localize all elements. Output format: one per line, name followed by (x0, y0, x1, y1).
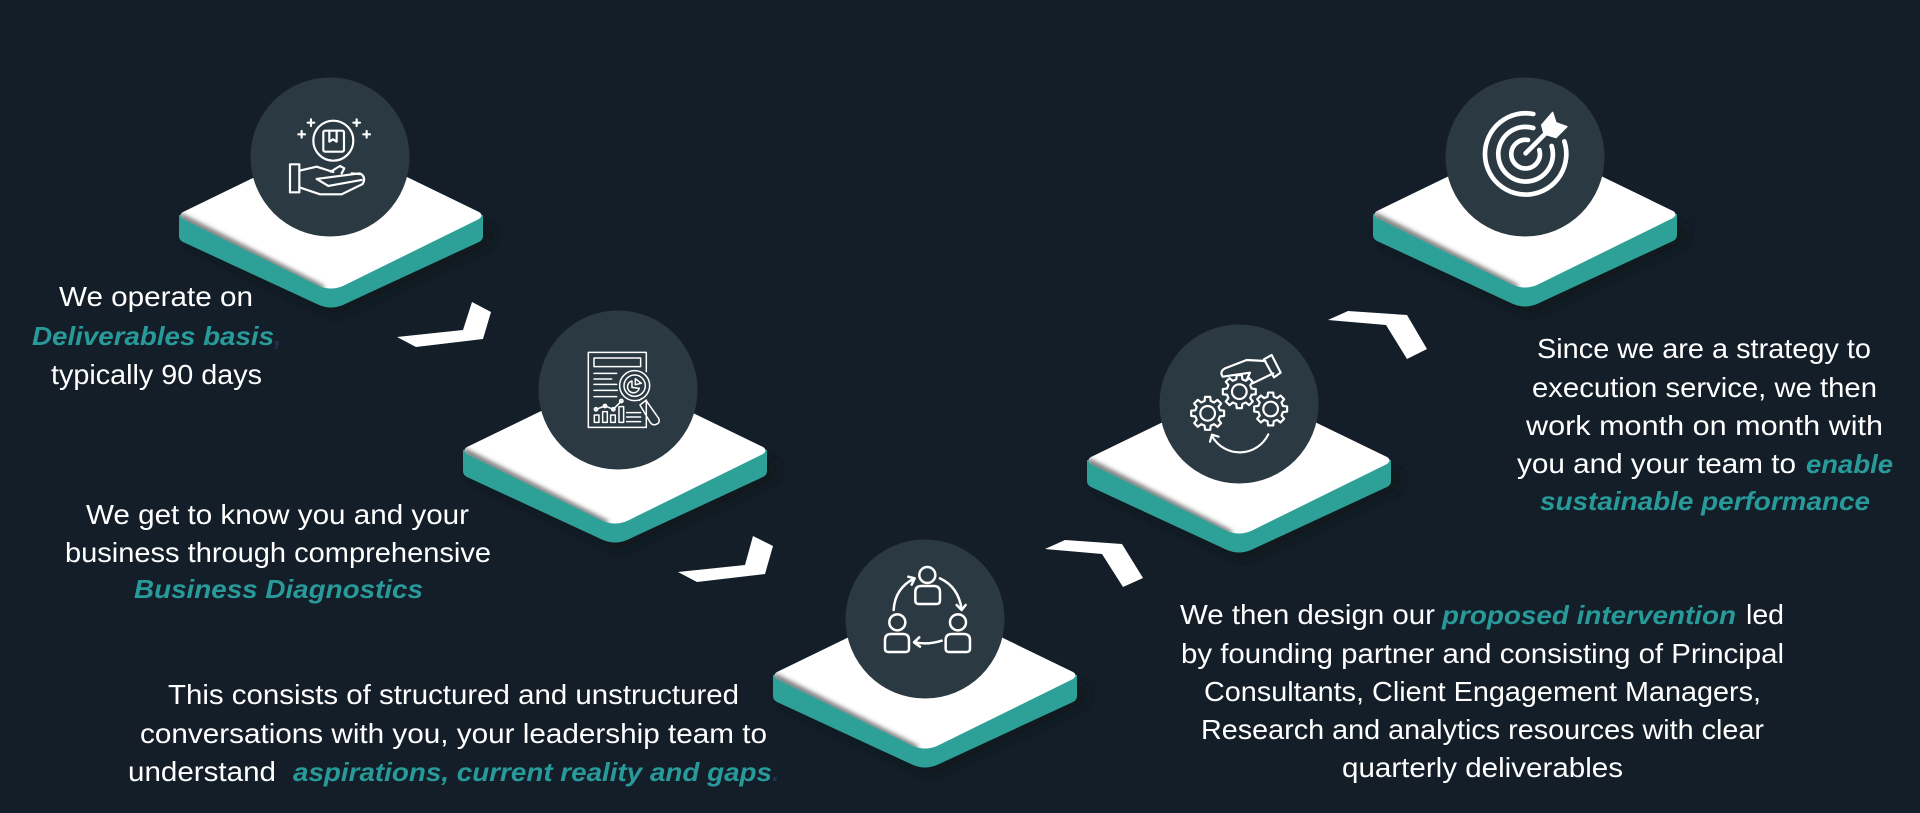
text block 3: This consists of structured and unstructured (168, 679, 739, 710)
text block 5: you and your team to (1517, 448, 1796, 479)
text block 3: conversations with you, your leadership team to (140, 718, 767, 749)
text block 5: enable (1806, 449, 1893, 479)
platform 4 (1087, 388, 1402, 561)
text block 5: work month on month with (1525, 410, 1883, 441)
text block 3: aspirations, current reality and gaps (293, 757, 772, 787)
text block 5 (1517, 333, 1893, 516)
text block 2: We get to know you and your (86, 499, 469, 530)
icon: hand with gears (1191, 355, 1287, 452)
arrow 2 (678, 536, 773, 582)
text block 2: business through comprehensive (65, 537, 491, 568)
platform 1 (179, 142, 494, 316)
text block 1: We operate on (59, 281, 253, 312)
arrow 4 (1328, 311, 1427, 359)
platform 3 (773, 602, 1088, 776)
text block 4: led (1746, 599, 1784, 630)
text block 3: . (772, 757, 779, 787)
text block 5: execution service, we then (1532, 372, 1877, 403)
text block 3 (128, 679, 779, 787)
text block 2 (65, 499, 491, 604)
text block 1: , (273, 321, 281, 351)
arrow 3 (1045, 540, 1143, 587)
icon circle 1 (250, 78, 410, 236)
text block 1 (32, 281, 281, 390)
step 1: deliverables platform (179, 78, 494, 316)
text block 3: understand (128, 756, 276, 787)
text block 4: Consultants, Client Engagement Managers, (1204, 676, 1761, 707)
text block 1: typically 90 days (51, 359, 262, 390)
text block 4: We then design our (1180, 599, 1435, 630)
icon circle 5 (1446, 78, 1604, 236)
text block 5: sustainable performance (1540, 486, 1870, 516)
arrow 1 (397, 302, 491, 347)
text block 2: Business Diagnostics (134, 574, 423, 604)
text block 4: quarterly deliverables (1342, 752, 1623, 783)
icon circle 4 (1160, 324, 1318, 484)
icon: report with magnifier (588, 352, 659, 427)
platform 2 (463, 378, 778, 551)
step 3: conversations platform (773, 540, 1088, 776)
text block 4 (1180, 599, 1784, 783)
platform 5 (1373, 142, 1688, 315)
text block 4: Research and analytics resources with clear (1201, 714, 1764, 745)
text block 5: Since we are a strategy to (1537, 333, 1871, 364)
step 5: performance platform (1373, 78, 1688, 315)
icon: hand holding box (290, 119, 370, 194)
step 2: diagnostics platform (463, 310, 778, 551)
text block 4: proposed intervention (1441, 600, 1736, 630)
icon circle 3 (846, 540, 1004, 698)
text block 1: Deliverables basis (32, 321, 274, 351)
icon: three people cycle (885, 567, 970, 652)
icon: target with arrow (1485, 112, 1567, 195)
text block 4: by founding partner and consisting of Principal (1181, 638, 1784, 669)
icon circle 2 (538, 310, 698, 470)
step 4: intervention platform (1087, 324, 1402, 561)
